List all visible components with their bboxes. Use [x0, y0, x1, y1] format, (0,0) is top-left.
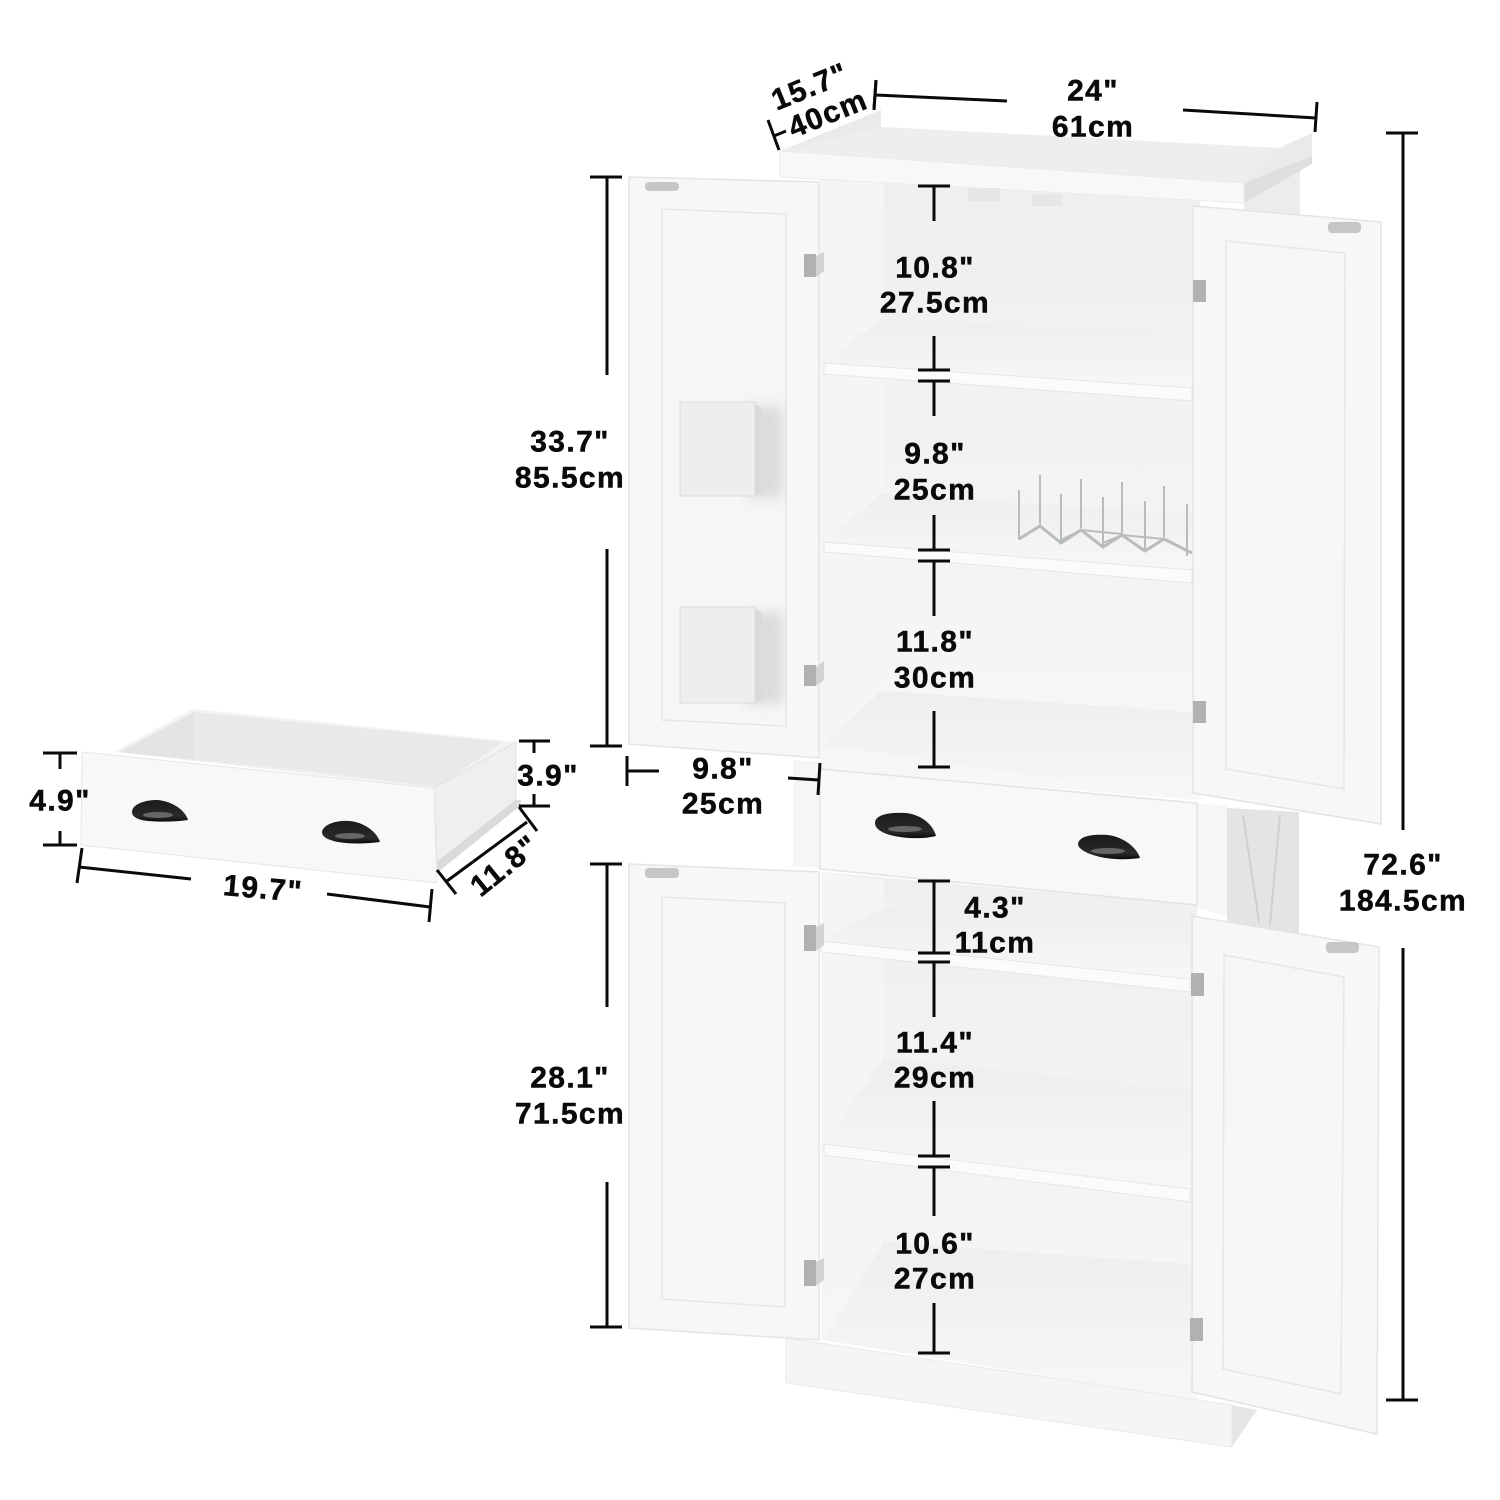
drawer on cabinet	[820, 769, 1197, 905]
dimension: lower compartment 4.3in: 11cm	[955, 926, 1035, 960]
dimension: drawer front height 4.9in	[29, 753, 91, 845]
dimension: door width 9.8in	[627, 752, 820, 820]
dimension: upper compartment 9.8in	[894, 381, 976, 550]
upper left door	[629, 177, 824, 758]
top panel with raised lip	[780, 110, 1312, 206]
dimension: lower door height 28.1in: 71.5cm	[515, 1098, 625, 1130]
dimension: drawer side height 3.9in: 3.9"	[517, 760, 579, 792]
dimension: lower compartment 10.6in: 10.6"	[895, 1228, 975, 1260]
pocket shadows	[745, 406, 783, 704]
dimension: upper door height 33.7in	[515, 177, 625, 746]
dimension: upper compartment 10.8in: 10.8"	[895, 252, 975, 284]
drawer interior	[114, 709, 516, 788]
dimension: overall depth 15.7in	[767, 57, 876, 150]
dimension: lower compartment 4.3in: 4.3"	[964, 892, 1026, 924]
drawer front	[81, 752, 437, 883]
dimension: drawer width 19.7in	[77, 848, 432, 922]
dimension: overall height 72.6in	[1339, 133, 1467, 1400]
dimension: lower compartment 11.4in: 11.4"	[896, 1026, 974, 1060]
wire plate rack	[1019, 475, 1192, 556]
dimension: overall depth 15.7in: 15.7"	[767, 57, 853, 117]
dimension: overall width 24in: 61cm	[1052, 110, 1134, 144]
dimension: lower compartment 10.6in: 27cm	[894, 1262, 976, 1296]
dimension: drawer depth 11.8in	[437, 807, 546, 903]
dimension: door width 9.8in: 9.8"	[692, 752, 754, 786]
upper right door	[1193, 206, 1381, 824]
dimension: overall depth 15.7in: 40cm	[784, 83, 872, 145]
dimension: upper compartment 11.8in: 30cm	[894, 662, 976, 694]
dimension: upper compartment 9.8in: 9.8"	[904, 438, 966, 470]
dimension: overall width 24in: 24"	[1067, 74, 1119, 108]
dimension: upper compartment 9.8in: 25cm	[894, 474, 976, 506]
handle left	[132, 800, 188, 822]
dimension: lower compartment 4.3in	[918, 881, 1035, 960]
dimension: lower compartment 10.6in	[894, 1167, 976, 1353]
base plinth	[786, 1338, 1257, 1447]
dimension: drawer front height 4.9in: 4.9"	[29, 784, 91, 818]
dimension: upper compartment 11.8in: 11.8"	[896, 626, 974, 658]
cabinet illustration	[629, 110, 1381, 1447]
dimension: door width 9.8in: 25cm	[682, 788, 764, 820]
separate drawer illustration	[81, 709, 521, 883]
dimension: upper compartment 10.8in: 27.5cm	[880, 286, 990, 320]
handle right	[322, 821, 380, 844]
dimension: lower compartment 11.4in	[894, 962, 976, 1156]
lower pocket	[680, 607, 762, 703]
dimension: upper door height 33.7in: 33.7"	[530, 426, 610, 458]
dimension: lower door height 28.1in	[515, 864, 625, 1327]
drawer side	[434, 742, 516, 862]
upper floor and shelves	[824, 319, 1200, 800]
hinges	[804, 252, 824, 686]
dimension: lower compartment 11.4in: 29cm	[894, 1062, 976, 1094]
dimension: upper door height 33.7in: 85.5cm	[515, 462, 625, 494]
dimension: overall height 72.6in: 72.6"	[1363, 848, 1443, 882]
drawer handle right	[1078, 835, 1140, 859]
dimension: upper compartment 11.8in	[894, 561, 976, 767]
lower floor and shelves	[821, 908, 1197, 1400]
upper pocket	[680, 402, 762, 496]
dimension: overall width 24in	[874, 74, 1317, 144]
lower left door	[629, 864, 824, 1340]
drawer runner	[437, 800, 521, 872]
drawer handle left	[875, 813, 936, 838]
dimension: upper compartment 10.8in	[880, 186, 990, 370]
cabinet body and interior	[793, 165, 1300, 1400]
dimension: drawer width 19.7in: 19.7"	[222, 869, 304, 909]
lower right door	[1190, 916, 1379, 1434]
dimension: drawer depth 11.8in: 11.8"	[464, 829, 546, 903]
dimension: drawer side height 3.9in	[517, 741, 579, 806]
dimension: lower door height 28.1in: 28.1"	[530, 1062, 610, 1094]
dimension: overall height 72.6in: 184.5cm	[1339, 884, 1467, 918]
